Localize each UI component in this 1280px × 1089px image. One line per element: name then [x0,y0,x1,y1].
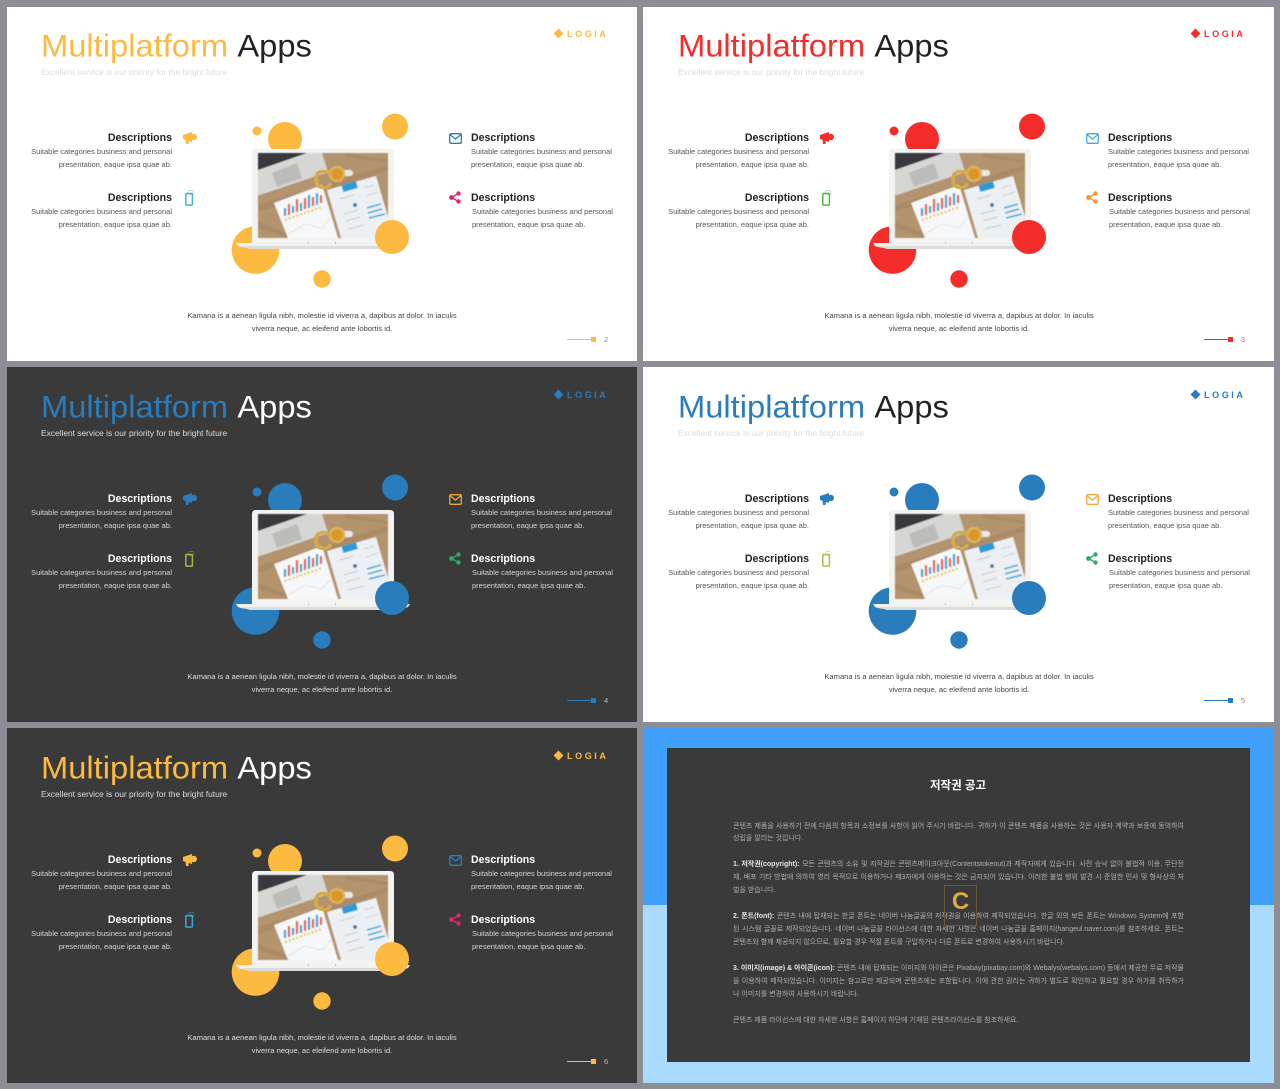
caption: Kamana is a aenean ligula nibh, molestie id viverra a, dapibus at dolor. In iaculis [187,672,457,681]
text block: right top [471,493,612,530]
icon: share [1086,191,1098,204]
logo: LOGIA [567,390,608,400]
text block: left top: Descriptions [108,132,172,144]
laptop illustration with circles [232,474,410,649]
text block: left bottom: Descriptions [745,192,809,204]
text block: left bottom: presentation, eaque ipsa quae ab. [696,220,809,229]
text block: right top [1108,493,1260,532]
caption: viverra neque, ac eleifend ante lobortis id. [889,324,1029,333]
logo: LOGIA [1204,390,1246,400]
text block: left bottom: Suitable categories business and personal [31,929,172,938]
notice body text: 벌을 받습니다. [733,887,776,894]
title: Multiplatform Apps [41,389,312,424]
caption: Kamana is a aenean ligula nibh, molestie id viverra a, dapibus at dolor. In iaculis [187,311,457,320]
notice body text: 을 이용하여 제작되었습니다. 이미지는 참고로만 제공되며 콘텐츠에는 포함됩니다. 이에 관한 권리는 귀하가 별도로 확인하고 필요할 경우 허가를 취득하거 [733,978,1184,985]
page number: 2 [604,335,608,344]
icon: phone [185,190,194,206]
text block: left top: Descriptions [745,493,809,505]
notice body text: 1. 저작권(copyright): 모든 콘텐츠의 소유 및 저작권은 콘텐츠메이크아웃(Contentstokeout)과 제작자에게 있습니다. 사전 승낙 없이 불법적 이용, 무단전 [733,861,1184,868]
icon: phone [822,190,832,206]
icon: mail [1086,133,1099,144]
text block: left top [657,493,809,532]
text block: right top: presentation, eaque ipsa quae ab. [471,882,584,891]
notice body text: 콘텐츠와 함께 제공되지 않으므로, 필요할 경우 적절 폰트를 구입하거나 다른 폰트로 변경하여 사용하시기 바랍니다. [733,939,1065,946]
icon: mail [449,855,462,866]
page number: 3 [1241,335,1245,344]
text block: right top: Suitable categories business and personal [471,147,612,156]
notice body text: 재, 배포 기타 방법에 의하여 영리 목적으로 이용하거나 제3자에게 이용하는 것은 금지되어 있습니다. 이러한 불법 행위 발견 시 준엄한 민사 및 형사상의 처 [733,874,1184,881]
text block: left top: presentation, eaque ipsa quae ab. [59,160,172,169]
notice body text: 나 이미지를 변경하여 사용하시기 바랍니다. [733,991,859,998]
text block: left bottom [657,553,809,592]
text block: left bottom [31,553,172,590]
caption [187,311,457,333]
page number [1204,335,1245,344]
text block: right top: Suitable categories business and personal [1108,508,1249,517]
icon: mail [449,133,462,144]
text block: right top: presentation, eaque ipsa quae ab. [1108,160,1221,169]
text block: left top [31,493,172,530]
laptop illustration with circles [868,114,1047,288]
text block: left top: presentation, eaque ipsa quae ab. [696,160,809,169]
text block: left top: Descriptions [108,493,172,505]
text block: left bottom: Descriptions [108,914,172,926]
text block: right bottom: Descriptions [471,553,535,565]
logo [1190,389,1246,401]
watermark logo: C [952,888,969,915]
text block: right bottom [472,914,624,953]
caption: viverra neque, ac eleifend ante lobortis id. [252,324,392,333]
text block: left bottom [31,192,172,229]
panel: slide 5 blue on white [643,367,1274,722]
text block: left bottom: Suitable categories business and personal [31,207,172,216]
icon: share [449,913,461,926]
icon: megaphone [820,132,834,144]
text block: right top: Suitable categories business and personal [471,869,612,878]
text block: left top: Suitable categories business and personal [668,508,809,517]
text block: right bottom: presentation, eaque ipsa quae ab. [1109,220,1222,229]
notice heading: 저작권 공고 [930,780,986,792]
text block: left bottom: Suitable categories business and personal [668,207,809,216]
page number [1203,695,1249,707]
text block: left bottom: presentation, eaque ipsa quae ab. [59,581,172,590]
text block: right top: Descriptions [1108,493,1172,505]
text block: left top: Suitable categories business and personal [31,147,172,156]
page number [567,335,608,344]
logo: LOGIA [567,29,608,39]
logo: LOGIA [1204,29,1246,39]
text block: right bottom: presentation, eaque ipsa quae ab. [472,220,585,229]
text block: right bottom [1108,192,1250,229]
caption: Kamana is a aenean ligula nibh, molestie id viverra a, dapibus at dolor. In iaculis [824,311,1094,320]
text block: left bottom: Suitable categories business and personal [31,568,172,577]
text block: right top: Suitable categories business and personal [471,508,612,517]
icon: share [449,552,461,565]
icon: phone [822,551,832,567]
text block: right top [1108,132,1249,169]
text block: right bottom: Descriptions [1108,553,1172,565]
notice body text: 2. 폰트(font): 콘텐츠 내에 탑재되는 한글 폰트는 네이버 나눔글꼴의 저작권을 이용하여 제작되었습니다. 한글 외의 보든 폰트는 Windows System에 포함 [733,913,1184,920]
text block: right top [471,854,623,893]
icon: share [1086,552,1098,565]
text block: right top: Descriptions [471,493,535,505]
text block: right bottom: Descriptions [471,192,535,204]
title: Multiplatform Apps [41,750,312,785]
icon: megaphone [183,854,197,866]
icon: mail [449,494,462,505]
caption [187,672,457,694]
page number [566,1056,612,1068]
text block: left top: Suitable categories business and personal [31,508,172,517]
laptop illustration with circles [232,114,410,288]
text block: left bottom: Descriptions [108,553,172,565]
subtitle: Excellent service is our priority for the bright future [41,428,227,438]
text block: left top: presentation, eaque ipsa quae ab. [696,521,809,530]
text block: left bottom [20,914,172,953]
subtitle: Excellent service is our priority for the bright future [41,67,227,77]
panel: slide 4 blue on dark [7,367,637,722]
panel: slide 3 red on white [643,7,1274,361]
icon: megaphone [183,132,197,144]
text block: left top [668,132,809,169]
notice body text: 콘텐츠 제품 라이선스에 대한 자세한 사항은 홈페이지 하단에 기재된 콘텐츠라이선스를 참조하세요. [733,1017,1018,1024]
panel: copyright notice [643,728,1274,1083]
dark notice card [667,748,1250,1062]
caption: Kamana is a aenean ligula nibh, molestie id viverra a, dapibus at dolor. In iaculis [187,1033,457,1042]
page number: 5 [1241,696,1245,705]
text block: left bottom: presentation, eaque ipsa quae ab. [696,581,809,590]
text block: left bottom: Descriptions [108,192,172,204]
notice body text: 된 시스템 글꼴로 제작되었습니다. 네이버 나눔글꼴 라이선스에 대한 자세한 사항은 네이버 나눔글꼴 홈페이지(hangeul.naver.com)를 참조하세요. 폰트는 [733,926,1184,933]
text block: left top: presentation, eaque ipsa quae ab. [59,882,172,891]
caption: viverra neque, ac eleifend ante lobortis id. [889,685,1029,694]
title: Multiplatform Apps [678,28,949,63]
text block: right top: Descriptions [471,132,535,144]
title: Multiplatform Apps [41,28,312,63]
laptop illustration with circles [228,830,418,1015]
caption: viverra neque, ac eleifend ante lobortis id. [252,1046,392,1055]
caption [807,670,1111,696]
notice body text: 3. 이미지(image) & 아이콘(icon): 콘텐츠 내에 탑재되는 이미지와 아이콘은 Pixabay(pixabay.com)와 Webalys(webalys.com) 등에서 제공한 무료 저작물 [733,965,1184,972]
laptop illustration with circles [865,469,1055,654]
text block: right top: presentation, eaque ipsa quae ab. [1108,521,1221,530]
text block: right top: presentation, eaque ipsa quae ab. [471,521,584,530]
text block: left bottom: presentation, eaque ipsa quae ab. [59,942,172,951]
text block: left top: Descriptions [745,132,809,144]
text block: left bottom: presentation, eaque ipsa quae ab. [59,220,172,229]
subtitle: Excellent service is our priority for the bright future [678,428,864,438]
text block: left bottom: Suitable categories business and personal [668,568,809,577]
text block: right bottom [1109,553,1261,592]
text block: left bottom: Descriptions [745,553,809,565]
page number: 4 [604,696,608,705]
caption: viverra neque, ac eleifend ante lobortis id. [252,685,392,694]
text block: right bottom [471,192,613,229]
text block: right bottom: Suitable categories business and personal [472,929,613,938]
subtitle: Excellent service is our priority for the bright future [41,789,227,799]
text block: right bottom: Suitable categories business and personal [472,568,613,577]
text block: left bottom [668,192,809,229]
text block: left top [20,854,172,893]
caption [170,1031,474,1057]
icon: share [449,191,461,204]
icon: phone [185,551,194,567]
text block: right bottom: Suitable categories business and personal [1109,568,1250,577]
text block: right bottom: Suitable categories business and personal [472,207,613,216]
text block: right top: Suitable categories business and personal [1108,147,1249,156]
page number: 6 [604,1057,608,1066]
text block: right bottom [471,553,613,590]
notice body text: 성립을 알리는 것입니다. [733,835,803,842]
text block: right bottom: presentation, eaque ipsa quae ab. [472,942,585,951]
icon: phone [185,912,195,928]
text block: left top: presentation, eaque ipsa quae ab. [59,521,172,530]
text block: right bottom: presentation, eaque ipsa quae ab. [472,581,585,590]
text block: right bottom: Descriptions [1108,192,1172,204]
panel: slide 6 yellow on dark [7,728,637,1083]
icon: megaphone [820,493,834,505]
text block: left top: Suitable categories business and personal [31,869,172,878]
title: Multiplatform Apps [678,389,949,424]
text block: left top [31,132,172,169]
logo [553,750,609,762]
text block: right bottom: Descriptions [471,914,535,926]
page number [567,696,608,705]
text block: right top [471,132,612,169]
notice body text: 콘텐츠 제품을 사용하기 전에 다음의 항목과 소정보를 사항이 읽어 주시기 바랍니다. 귀하가 이 콘텐츠 제품을 사용하는 것은 사용자 계약과 보증에 동의하여 [733,823,1184,830]
text block: right top: presentation, eaque ipsa quae ab. [471,160,584,169]
icon: mail [1086,494,1099,505]
text block: left top: Descriptions [108,854,172,866]
caption [824,311,1094,333]
subtitle: Excellent service is our priority for the bright future [678,67,864,77]
caption: Kamana is a aenean ligula nibh, molestie id viverra a, dapibus at dolor. In iaculis [824,672,1094,681]
text block: left top: Suitable categories business and personal [668,147,809,156]
icon: megaphone [183,493,197,505]
text block: right bottom: Suitable categories business and personal [1109,207,1250,216]
logo: LOGIA [567,751,608,761]
text block: right top: Descriptions [1108,132,1172,144]
text block: right bottom: presentation, eaque ipsa quae ab. [1109,581,1222,590]
panel: slide 2 yellow on white [7,7,637,361]
watermark logo [944,885,977,926]
text block: right top: Descriptions [471,854,535,866]
